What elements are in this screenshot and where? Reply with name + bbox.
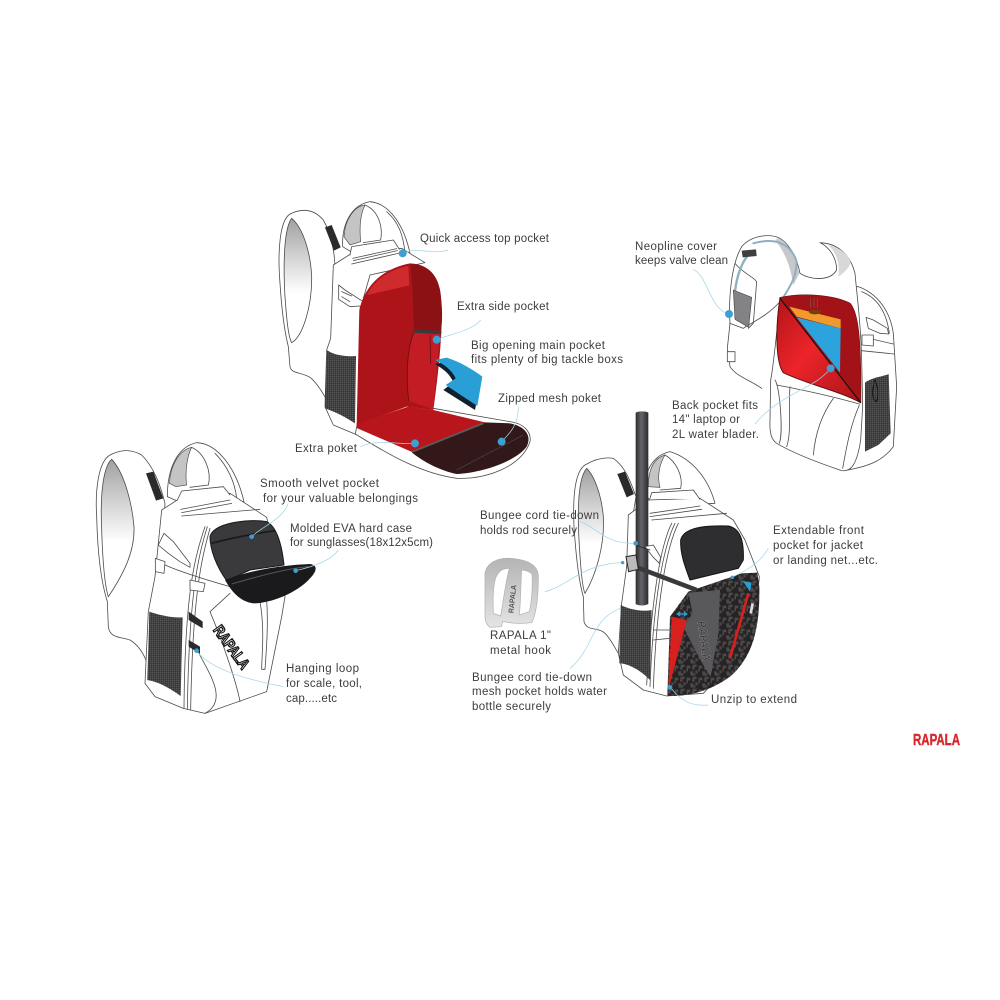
right shoulder strap <box>167 443 244 507</box>
label: back pocket <box>672 400 759 441</box>
neoprene valve cover <box>733 290 752 327</box>
label: velvet pocket <box>260 478 418 505</box>
label: main pocket: Big opening main pocket <box>471 340 606 352</box>
label: main pocket <box>471 340 623 366</box>
label: hanging loop: cap.....etc <box>286 693 337 705</box>
label: velvet pocket: Smooth velvet pocket <box>260 478 380 490</box>
left shoulder strap <box>279 210 341 403</box>
side mesh pocket <box>619 605 652 680</box>
label: quick access: Quick access top pocket <box>420 233 550 245</box>
hydration side panel <box>843 287 897 471</box>
label: EVA case: for sunglasses(18x12x5cm) <box>290 537 433 549</box>
label: hanging loop: for scale, tool, <box>286 678 362 690</box>
label: mesh pocket: Zipped mesh poket <box>498 393 602 405</box>
backpack body <box>618 490 759 696</box>
hydration tube <box>735 241 797 297</box>
red interior wall <box>357 263 442 425</box>
brand logo: RAPALA <box>913 732 960 749</box>
label: neoprene cover: Neopline cover <box>635 241 717 253</box>
label: hanging loop <box>286 663 362 705</box>
padded lower back ribs <box>775 380 859 468</box>
label: mesh bungee <box>472 672 607 713</box>
zipped mesh lid pocket <box>412 422 529 474</box>
backpack: open main compartment <box>279 202 530 478</box>
metal hook icon <box>485 558 538 627</box>
label: back pocket: Back pocket fits <box>672 400 758 412</box>
label: rod bungee <box>480 510 599 537</box>
label: mesh bungee: bottle securely <box>472 701 551 713</box>
label: EVA case <box>290 523 433 549</box>
logo on gray panel: RAPALA <box>694 620 714 662</box>
red back pocket <box>777 295 861 403</box>
backpack: rear view with hydration pocket <box>693 236 897 471</box>
extended camo front pocket <box>667 573 759 696</box>
left shoulder strap <box>96 451 165 662</box>
base shell of opened bag <box>355 408 530 478</box>
label: rod bungee: holds rod securely <box>480 525 577 537</box>
side mesh pocket <box>147 612 183 696</box>
label: back pocket: 14" laptop or <box>672 414 740 426</box>
tie-down strap and buckle <box>626 545 697 590</box>
molded case lower tray <box>212 531 316 603</box>
label: back pocket: 2L water blader. <box>672 429 759 441</box>
right shoulder strap <box>643 452 715 507</box>
leader lines and dots <box>545 522 768 705</box>
metal hook icon: RAPALA <box>506 584 518 614</box>
leader lines and dots <box>194 503 338 687</box>
label: metal hook: metal hook <box>490 645 551 657</box>
leader lines and dots <box>360 249 518 447</box>
back panel and shoulder straps <box>727 236 863 471</box>
label: velvet pocket: for your valuable belongings <box>263 493 418 505</box>
label: extendable pocket <box>773 525 878 567</box>
left shoulder strap <box>574 458 636 653</box>
label: hanging loop: Hanging loop <box>286 663 359 675</box>
label: extendable pocket: or landing net...etc. <box>773 555 878 567</box>
molded case upper shell <box>210 521 284 581</box>
backpack: rod carry and extended front pocket <box>485 411 768 705</box>
label: side pocket: Extra side pocket <box>457 301 550 313</box>
blue arrow <box>435 358 482 410</box>
backpack body side <box>325 240 425 435</box>
backpack: front view with hard case <box>96 443 338 713</box>
right shoulder strap <box>343 202 411 263</box>
label: metal hook <box>490 630 551 657</box>
blue extension arrows <box>676 580 752 617</box>
label: extendable pocket: Extendable front <box>773 525 865 537</box>
red floor panel <box>357 407 485 454</box>
label: unzip: Unzip to extend <box>711 694 797 706</box>
leader lines and dots <box>693 269 835 424</box>
label: extendable pocket: pocket for jacket <box>773 540 864 552</box>
label: extra pocket: Extra poket <box>295 443 358 455</box>
label: mesh bungee: Bungee cord tie-down <box>472 672 592 684</box>
brand logo on pocket: RAPALA <box>209 622 253 673</box>
side mesh pocket <box>325 350 356 423</box>
feature labels <box>260 233 878 713</box>
label: metal hook: RAPALA 1" <box>490 630 551 642</box>
label: neoprene cover <box>635 241 728 267</box>
label: EVA case: Molded EVA hard case <box>290 523 412 535</box>
label: neoprene cover: keeps valve clean <box>635 255 728 267</box>
label: mesh bungee: mesh pocket holds water <box>472 686 607 698</box>
backpack body <box>145 487 285 713</box>
label: main pocket: fits plenty of big tackle boxs <box>471 354 623 366</box>
molded case <box>681 526 743 580</box>
label: rod bungee: Bungee cord tie-down <box>480 510 599 522</box>
fishing rod <box>636 411 648 605</box>
